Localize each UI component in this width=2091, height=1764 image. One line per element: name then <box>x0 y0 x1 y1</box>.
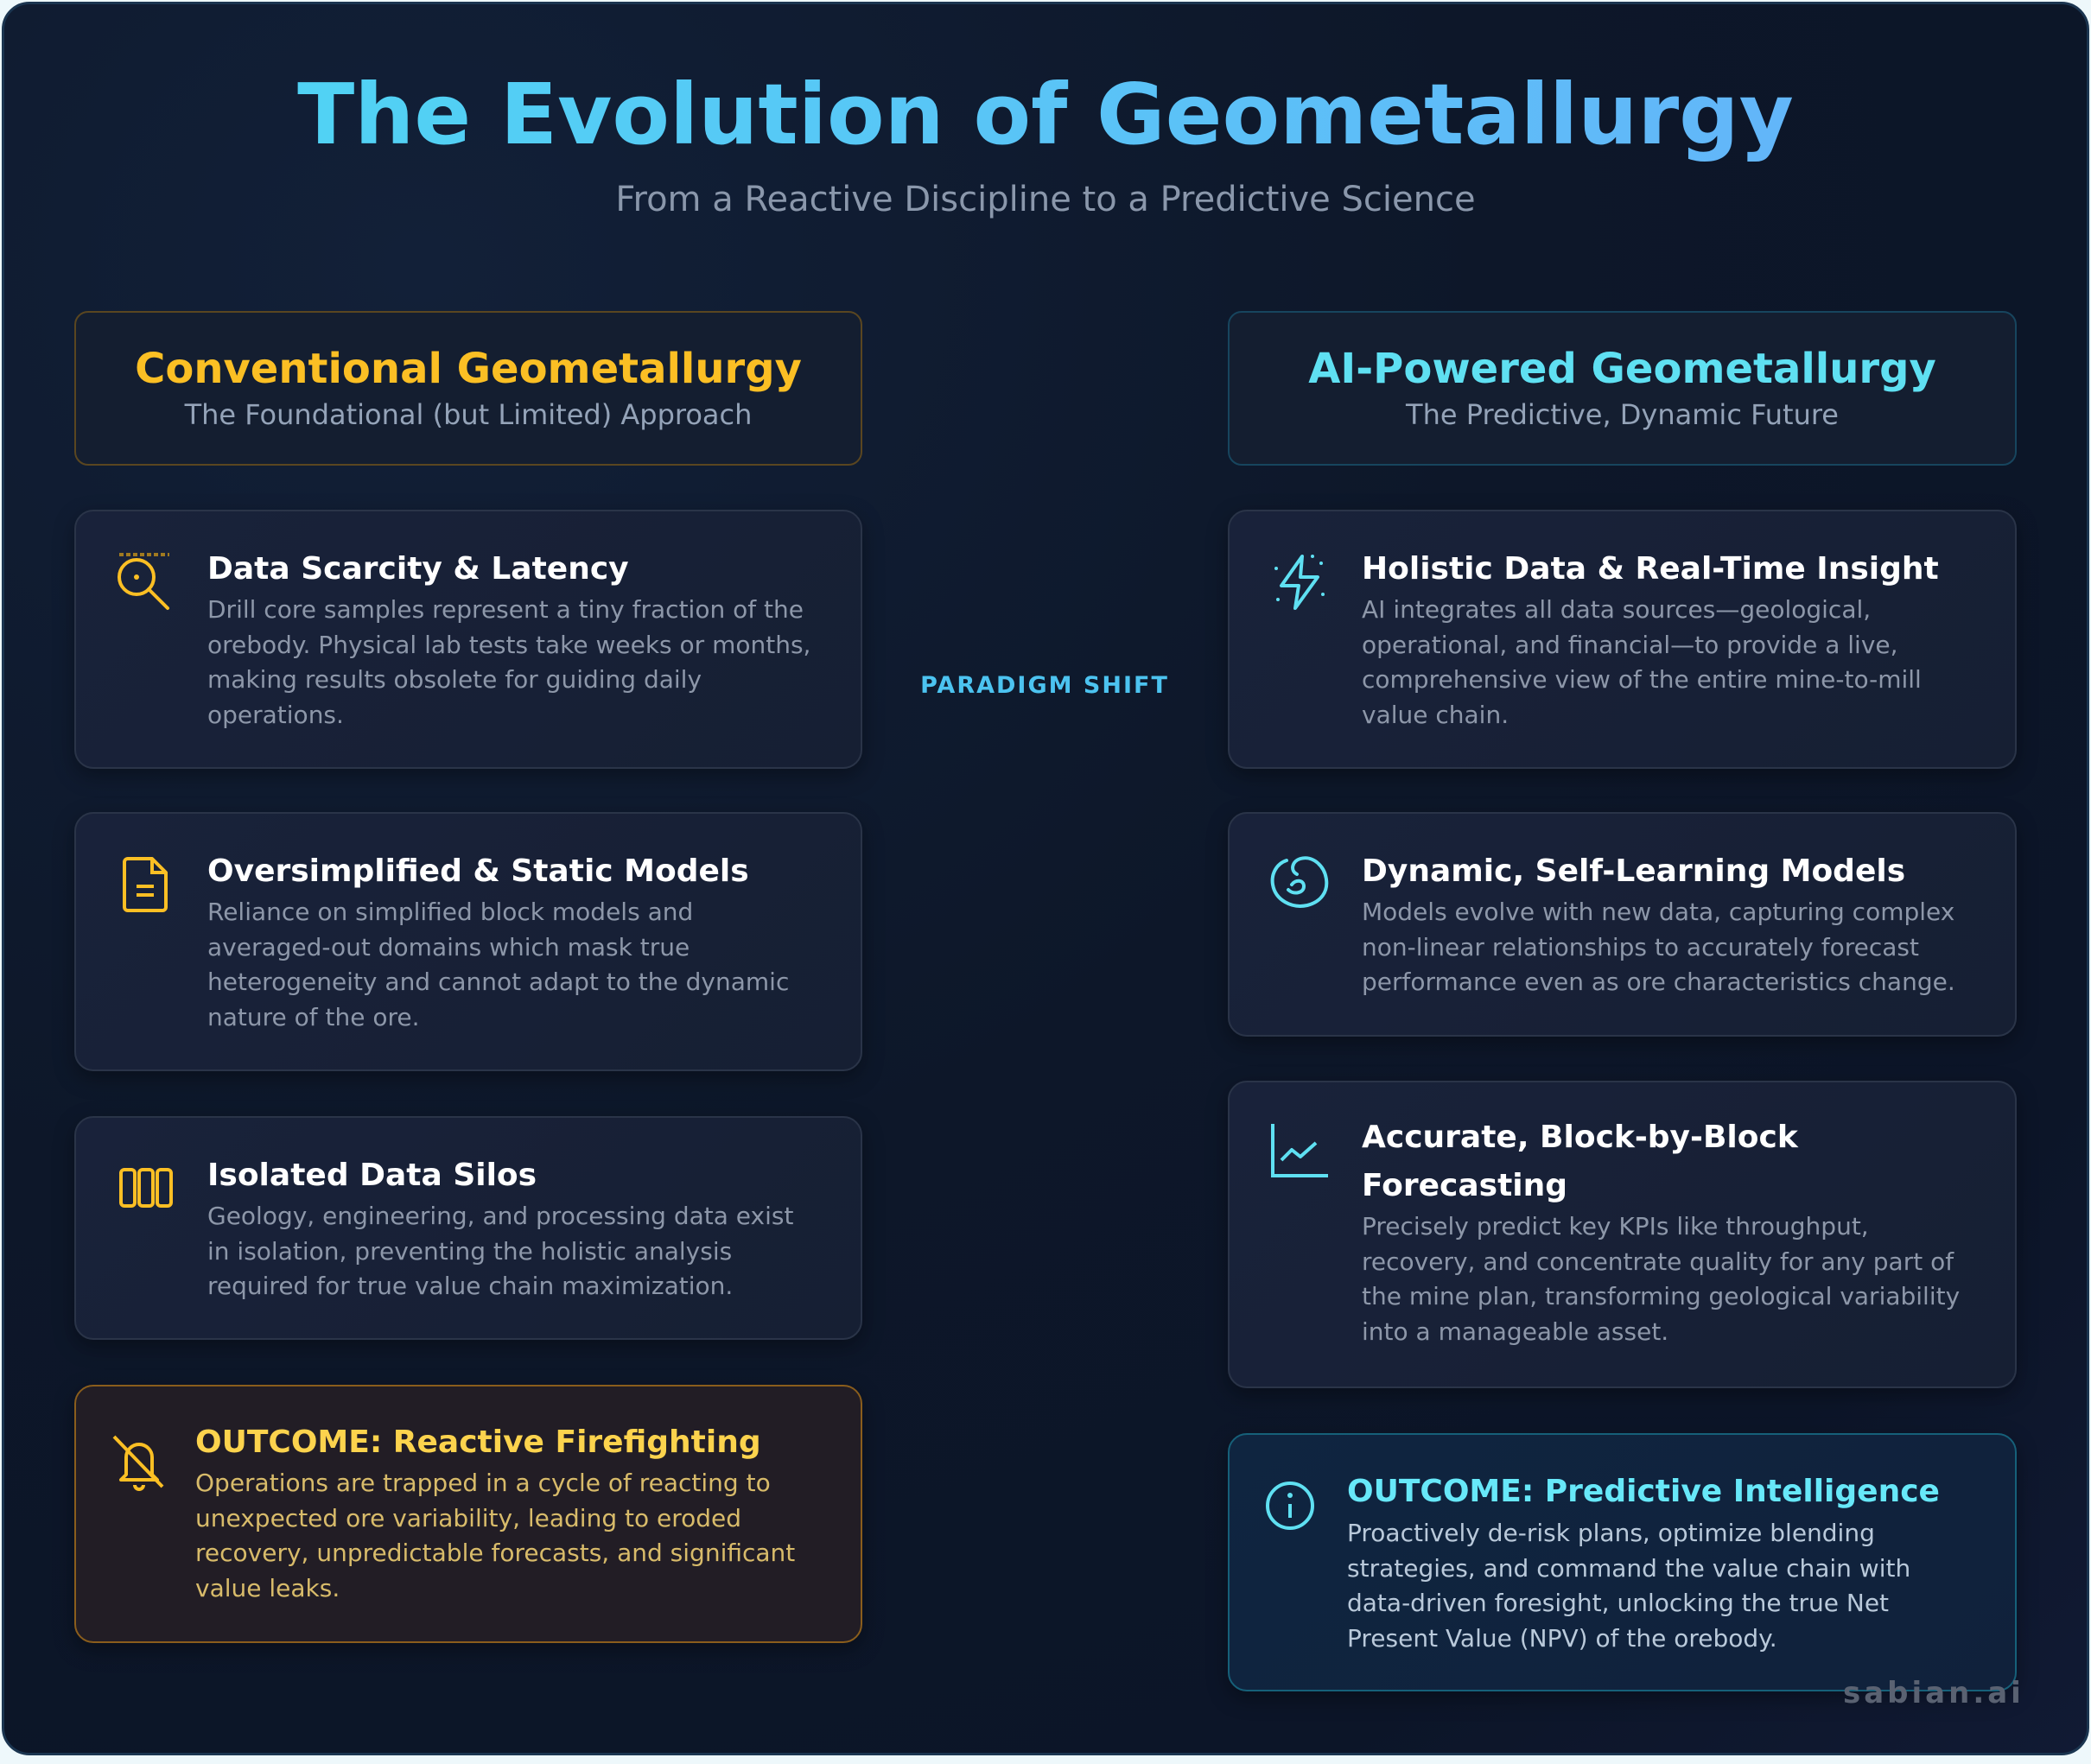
card: holistic data: value chain. <box>1362 700 1509 729</box>
subtitle: From a Reactive Discipline to a Predictive Science <box>615 180 1476 219</box>
outcome: predictive intelligence <box>1228 1433 2017 1691</box>
card: oversimplified models: averaged-out domains which mask true <box>207 933 690 961</box>
outcome: reactive firefighting: value leaks. <box>195 1574 340 1602</box>
card: block forecasting: Forecasting <box>1362 1168 1567 1203</box>
icon: document <box>123 857 168 912</box>
card: holistic data: comprehensive view of the entire mine-to-mill <box>1362 665 1922 694</box>
icon: line chart <box>1271 1124 1328 1177</box>
outcome: predictive intelligence: Present Value (NPV) of the orebody. <box>1347 1624 1777 1652</box>
card: oversimplified models: Reliance on simplified block models and <box>207 898 693 926</box>
outcome: predictive intelligence: OUTCOME: Predictive Intelligence <box>1347 1474 1940 1509</box>
icon: lightning <box>1274 555 1325 610</box>
card: data scarcity: operations. <box>207 700 344 729</box>
paradigm shift label: PARADIGM SHIFT <box>920 672 1169 699</box>
header: ai-powered: The Predictive, Dynamic Future <box>1406 398 1839 431</box>
card: data silos: Isolated Data Silos <box>207 1158 537 1193</box>
card: data scarcity: making results obsolete for guiding daily <box>207 665 702 694</box>
outcome: reactive firefighting: Operations are trapped in a cycle of reacting to <box>195 1469 771 1497</box>
card: self-learning: performance even as ore characteristics change. <box>1362 968 1955 996</box>
card: self-learning: non-linear relationships to accurately forecast <box>1362 933 1919 961</box>
header: conventional: The Foundational (but Limited) Approach <box>185 398 752 431</box>
card: self-learning: Models evolve with new data, capturing complex <box>1362 898 1954 926</box>
outcome: reactive firefighting: recovery, unpredictable forecasts, and significant <box>195 1539 795 1567</box>
outcome: reactive firefighting <box>74 1385 862 1643</box>
icon: info <box>1266 1482 1314 1530</box>
card: holistic data: operational, and financial—to provide a live, <box>1362 631 1898 658</box>
card: block forecasting: Precisely predict key KPIs like throughput, <box>1362 1212 1869 1241</box>
card: self-learning <box>1228 812 2017 1037</box>
header: conventional <box>74 311 862 466</box>
card: block forecasting: recovery, and concentrate quality for any part of <box>1362 1247 1954 1275</box>
header: conventional: Conventional Geometallurgy <box>135 345 802 393</box>
outcome: reactive firefighting: unexpected ore variability, leading to eroded <box>195 1503 741 1532</box>
card: data scarcity: Data Scarcity & Latency <box>207 551 629 587</box>
card: holistic data: AI integrates all data sources—geological, <box>1362 595 1871 624</box>
card: holistic data <box>1228 510 2017 769</box>
icon: columns <box>119 1168 173 1208</box>
header: ai-powered: AI-Powered Geometallurgy <box>1308 345 1936 393</box>
card: data silos: Geology, engineering, and processing data exist <box>207 1202 793 1230</box>
card: block forecasting: into a manageable asset. <box>1362 1317 1668 1346</box>
title <box>0 59 2091 171</box>
card: block forecasting: Accurate, Block-by-Block <box>1362 1120 1798 1155</box>
card: data silos: required for true value chain maximization. <box>207 1272 733 1300</box>
card: block forecasting: the mine plan, transforming geological variability <box>1362 1282 1960 1310</box>
outcome: predictive intelligence: data-driven foresight, unlocking the true Net <box>1347 1589 1889 1617</box>
card: data silos <box>74 1116 862 1340</box>
icon: brain swirl <box>1270 856 1329 908</box>
card: oversimplified models <box>74 812 862 1071</box>
card: oversimplified models: Oversimplified & Static Models <box>207 853 749 889</box>
card: holistic data: Holistic Data & Real-Time Insight <box>1362 551 1939 587</box>
card: oversimplified models: nature of the ore. <box>207 1002 420 1031</box>
header: ai-powered <box>1228 311 2017 466</box>
card: data scarcity: orebody. Physical lab tests take weeks or months, <box>207 631 810 658</box>
card: oversimplified models: heterogeneity and cannot adapt to the dynamic <box>207 968 789 996</box>
outcome: reactive firefighting: OUTCOME: Reactive Firefighting <box>195 1425 761 1460</box>
outcome: predictive intelligence: Proactively de-risk plans, optimize blending <box>1347 1519 1875 1547</box>
card: data scarcity <box>74 510 862 769</box>
card: self-learning: Dynamic, Self-Learning Models <box>1362 853 1905 889</box>
title: The Evolution of Geometallurgy <box>297 66 1794 163</box>
card: data scarcity: Drill core samples represent a tiny fraction of the <box>207 595 804 624</box>
icon: bell off <box>112 1436 164 1491</box>
icon: magnifier <box>118 553 169 610</box>
watermark: sabian.ai <box>1843 1676 2024 1710</box>
card: data silos: in isolation, preventing the holistic analysis <box>207 1237 732 1265</box>
outcome: predictive intelligence: strategies, and command the value chain with <box>1347 1553 1910 1583</box>
card: block forecasting <box>1228 1081 2017 1388</box>
